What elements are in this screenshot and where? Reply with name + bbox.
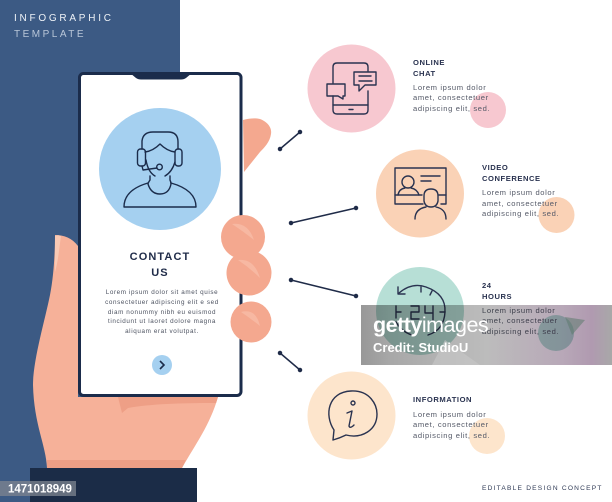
text: Lorem ipsum dolor [413,83,486,92]
text: adipiscing elit, sed. [413,104,490,113]
heading: infographic template: TEMPLATE [14,29,86,40]
text: amet, consectetuer [413,420,489,429]
body text [105,289,219,335]
avatar circle [99,108,221,230]
watermark: getty images: gettyimages [373,313,488,337]
heading: contact us [130,251,190,279]
text: amet, consectetuer [482,316,558,325]
body text: aliquam erat volutpat. [125,328,199,335]
button [152,355,172,375]
heading: infographic template [14,13,114,40]
icon: info speech bubble [329,391,377,440]
text: adipiscing elit, sed. [482,209,559,218]
text: VIDEO [482,163,508,172]
icon: 24 hour clock [396,285,445,335]
body text: consectetuer adipiscing elit e sed [105,299,219,306]
text: Lorem ipsum dolor [482,306,555,315]
text: amet, consectetuer [482,199,558,208]
body text: Lorem ipsum dolor sit amet quise [106,289,218,296]
illustration: hand [33,118,271,468]
panel: blue background [0,0,180,502]
item: video conference [376,150,574,238]
text: amet, consectetuer [413,93,489,102]
connector lines [278,130,358,372]
text: ONLINE [413,58,445,67]
shirt cuff [30,468,197,502]
text [482,281,559,336]
heading: contact us: US [151,267,169,279]
text [482,163,559,218]
text: adipiscing elit, sed. [413,431,490,440]
text: CONFERENCE [482,174,541,183]
image id label [0,481,76,496]
icon: phone with chat bubbles [327,63,376,114]
text: 24 [482,281,492,290]
body text: diam nonummy nibh eu euismod [108,309,216,316]
heading: infographic template: INFOGRAPHIC [14,13,114,24]
item: information [308,372,505,460]
watermark: getty images [361,305,612,365]
phone [80,73,241,396]
body text: tincidunt ut laoret dolore magna [108,318,216,325]
text: adipiscing elit, sed. [482,327,559,336]
item: online chat [308,44,506,132]
icon: agent with headset [124,132,196,207]
icon: video call [395,168,446,219]
image id label: 1471018949 [8,484,72,496]
fingers [221,215,272,342]
text [413,58,490,113]
item: 24 hours [376,267,574,355]
text: CHAT [413,69,436,78]
heading: contact us: CONTACT [130,251,190,263]
text: Lorem ipsum dolor [413,410,486,419]
text: INFORMATION [413,395,472,404]
text: Lorem ipsum dolor [482,188,555,197]
footer caption: EDITABLE DESIGN CONCEPT [482,485,603,492]
text [413,395,490,440]
watermark: getty images: Credit: StudioU [373,340,468,355]
text: HOURS [482,292,512,301]
